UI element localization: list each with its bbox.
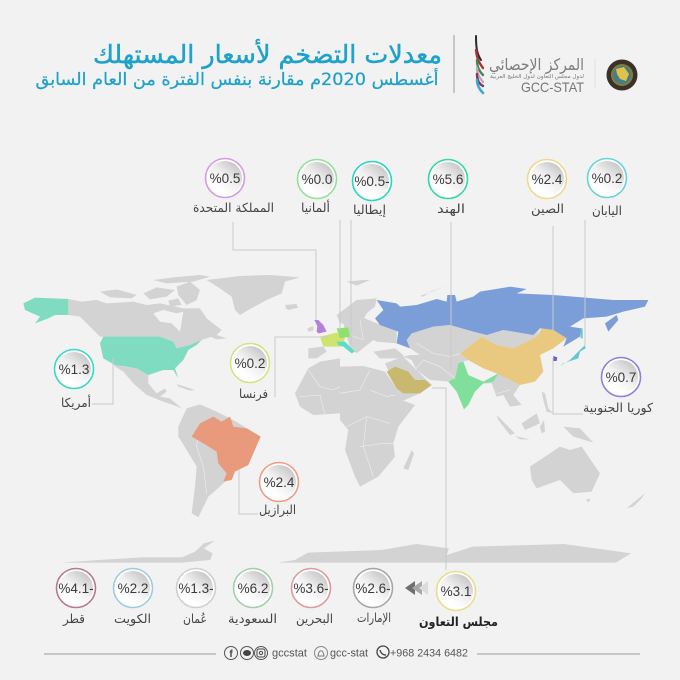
callout: UAE: الإمارات: [357, 610, 391, 626]
callout: China: [528, 160, 566, 217]
callout: Italy: إيطاليا: [353, 202, 386, 217]
country: UK: [314, 320, 327, 333]
callout: Saudi Arabia: [228, 568, 277, 627]
country: USA: [23, 298, 202, 378]
logo arabic name: المركز الإحصائي: [489, 55, 584, 75]
icon: whatsapp: [377, 646, 389, 658]
world map: [23, 275, 648, 563]
callout: United Kingdom: [193, 158, 274, 215]
callout: GCC: [419, 572, 498, 629]
icon: GCC emblem: [606, 60, 638, 90]
callout: Japan: %0.2: [592, 171, 622, 186]
map: highlighted countries: [23, 287, 648, 482]
country: Brazil: [192, 417, 261, 482]
callout: USA: [54, 350, 94, 411]
leader lines: [92, 220, 585, 570]
callout: South Korea: %0.7: [606, 370, 636, 385]
callout: Japan: [588, 158, 626, 218]
callout: UAE: [354, 568, 392, 626]
icon: facebook: [224, 646, 238, 660]
callout: China: %2.4: [532, 172, 563, 187]
subtitle: أغسطس 2020م مقارنة بنفس الفترة من العام السابق: [36, 68, 438, 90]
callout: Qatar: قطر: [62, 611, 85, 627]
callout: United Kingdom: المملكة المتحدة: [193, 200, 274, 215]
callout: Kuwait: الكويت: [114, 611, 151, 627]
icon: facebook: f: [229, 649, 233, 660]
logo: GCC-STAT: [476, 36, 584, 95]
icon: colored ribbon streaks: [476, 36, 483, 93]
callout: Italy: [352, 162, 392, 217]
callout: Germany: ألمانيا: [301, 199, 330, 215]
callout: Oman: %1.3-: [178, 581, 214, 596]
callout: China: الصين: [531, 201, 564, 217]
callout: Saudi Arabia: السعودية: [228, 611, 277, 627]
callout: Germany: %0.0: [302, 172, 332, 187]
header divider: [453, 35, 455, 93]
callout: Brazil: البرازيل: [259, 502, 296, 518]
callout: India: الهند: [437, 201, 465, 217]
callout: Brazil: %2.4: [264, 475, 295, 490]
icon: twitter: [240, 646, 254, 660]
callout: Oman: عُمان: [183, 611, 207, 626]
callout: Brazil: [259, 462, 298, 518]
callout: GCC: %3.1: [441, 584, 471, 599]
callout: Kuwait: [114, 568, 152, 627]
country: India: [448, 362, 498, 409]
callout: Italy: %0.5-: [354, 174, 390, 189]
callout: France: [230, 344, 270, 402]
callout: GCC: مجلس التعاون: [419, 614, 498, 629]
handle: gccstat: gccstat: [272, 648, 307, 660]
logo arabic subtitle: لدول مجلس التعاون لدول الخليج العربية: [490, 74, 584, 80]
icon: left arrows: [405, 581, 428, 595]
map: grey land: [61, 275, 645, 563]
country: Japan: [560, 328, 586, 366]
callout: UAE: %2.6-: [355, 581, 391, 596]
title: معدلات التضخم لأسعار المستهلك: [93, 38, 442, 70]
handle: gcc-stat: gcc-stat: [330, 648, 368, 660]
logo latin name: GCC-STAT: [521, 79, 584, 95]
icon: snapchat: [314, 646, 328, 660]
callout: Saudi Arabia: %6.2: [238, 581, 268, 596]
callout: Germany: [298, 160, 336, 215]
callout: Kuwait: %2.2: [118, 581, 148, 596]
icon: instagram: [254, 646, 268, 660]
callout: Bahrain: [292, 568, 333, 627]
country: Italy: [337, 342, 355, 353]
callout: United Kingdom: %0.5: [210, 171, 240, 186]
callout: France: %0.2: [235, 356, 265, 371]
callout: Qatar: %4.1-: [58, 581, 94, 596]
callout: India: %5.6: [433, 172, 463, 187]
country: France: [320, 333, 345, 347]
country: China: [460, 328, 567, 385]
callout: South Korea: [583, 358, 653, 416]
callout: France: فرنسا: [239, 386, 268, 402]
callout: Oman: [176, 568, 216, 626]
callout: USA: أمريكا: [61, 394, 91, 411]
map: bays and borders: [153, 310, 340, 493]
footer: [44, 646, 640, 660]
callout: USA: %1.3: [59, 362, 89, 377]
map: Antarctica: [61, 541, 631, 563]
phone number: +968 2434 6482: [390, 648, 468, 660]
country: Saudi Arabia: [387, 367, 432, 393]
callout: Qatar: [56, 568, 96, 627]
callout: India: [428, 160, 468, 217]
callout: Bahrain: البحرين: [296, 611, 333, 627]
callout: Bahrain: %3.6-: [293, 581, 329, 596]
country: Germany: [337, 327, 350, 338]
country: Russia: [375, 287, 648, 348]
callout: Japan: اليابان: [592, 203, 622, 218]
country: South Korea: [553, 356, 557, 361]
callout: South Korea: كوريا الجنوبية: [583, 400, 653, 416]
